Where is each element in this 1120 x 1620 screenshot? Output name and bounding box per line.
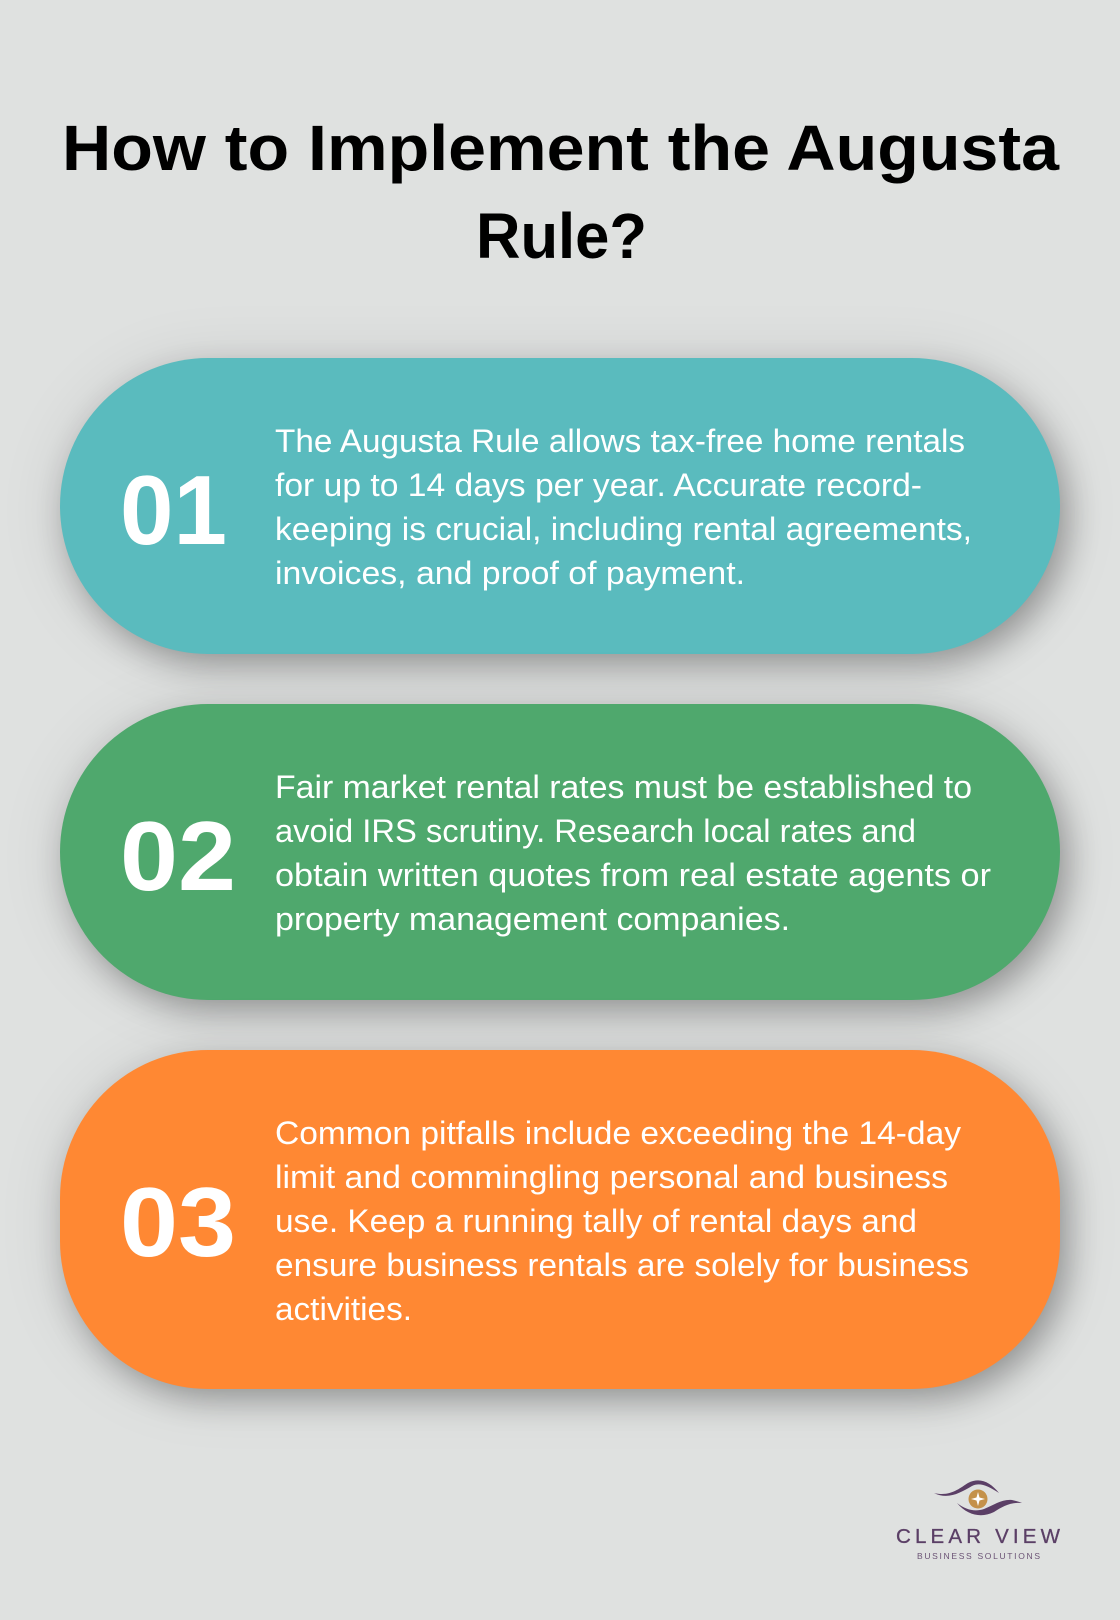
logo: Clear View Business Solutions: BUSINESS SOLUTIONS [917, 1551, 1040, 1561]
panel: step 01: for up to 14 days per year. Accurate record- [275, 467, 922, 503]
panel: step 01: keeping is crucial, including rental agreements, [275, 511, 972, 547]
panel: step 01: The Augusta Rule allows tax-free home rentals [275, 423, 965, 459]
panel: step 03: use. Keep a running tally of rental days and [275, 1203, 917, 1239]
title: How to Implement the Augusta [62, 112, 1059, 184]
panel: step 03: 03 [120, 1167, 236, 1277]
panel: step 01: 01 [120, 455, 227, 565]
title: Rule? [476, 200, 647, 272]
panel: step 02: obtain written quotes from real estate agents or [275, 857, 991, 893]
logo: Clear View Business Solutions [896, 1480, 1061, 1561]
panel: step 03: ensure business rentals are solely for business [275, 1247, 969, 1283]
panel: step 02: avoid IRS scrutiny. Research local rates and [275, 813, 916, 849]
panel: step 03: Common pitfalls include exceeding the 14-day [275, 1115, 962, 1151]
panel: step 03 [60, 1050, 1068, 1399]
logo: Clear View Business Solutions: CLEAR VIEW [896, 1525, 1061, 1548]
panel: step 01: invoices, and proof of payment. [275, 555, 745, 591]
panel: step 02: property management companies. [275, 901, 790, 937]
panel: step 03: activities. [275, 1291, 412, 1327]
panel: step 02: Fair market rental rates must be established to [275, 769, 972, 805]
panel: step 02: 02 [120, 801, 236, 911]
icon: eye [934, 1480, 1022, 1515]
panel: step 01 [60, 358, 1068, 664]
panel: step 02 [60, 704, 1068, 1010]
panel: step 03: limit and commingling personal and business [275, 1159, 948, 1195]
title [62, 112, 1059, 272]
